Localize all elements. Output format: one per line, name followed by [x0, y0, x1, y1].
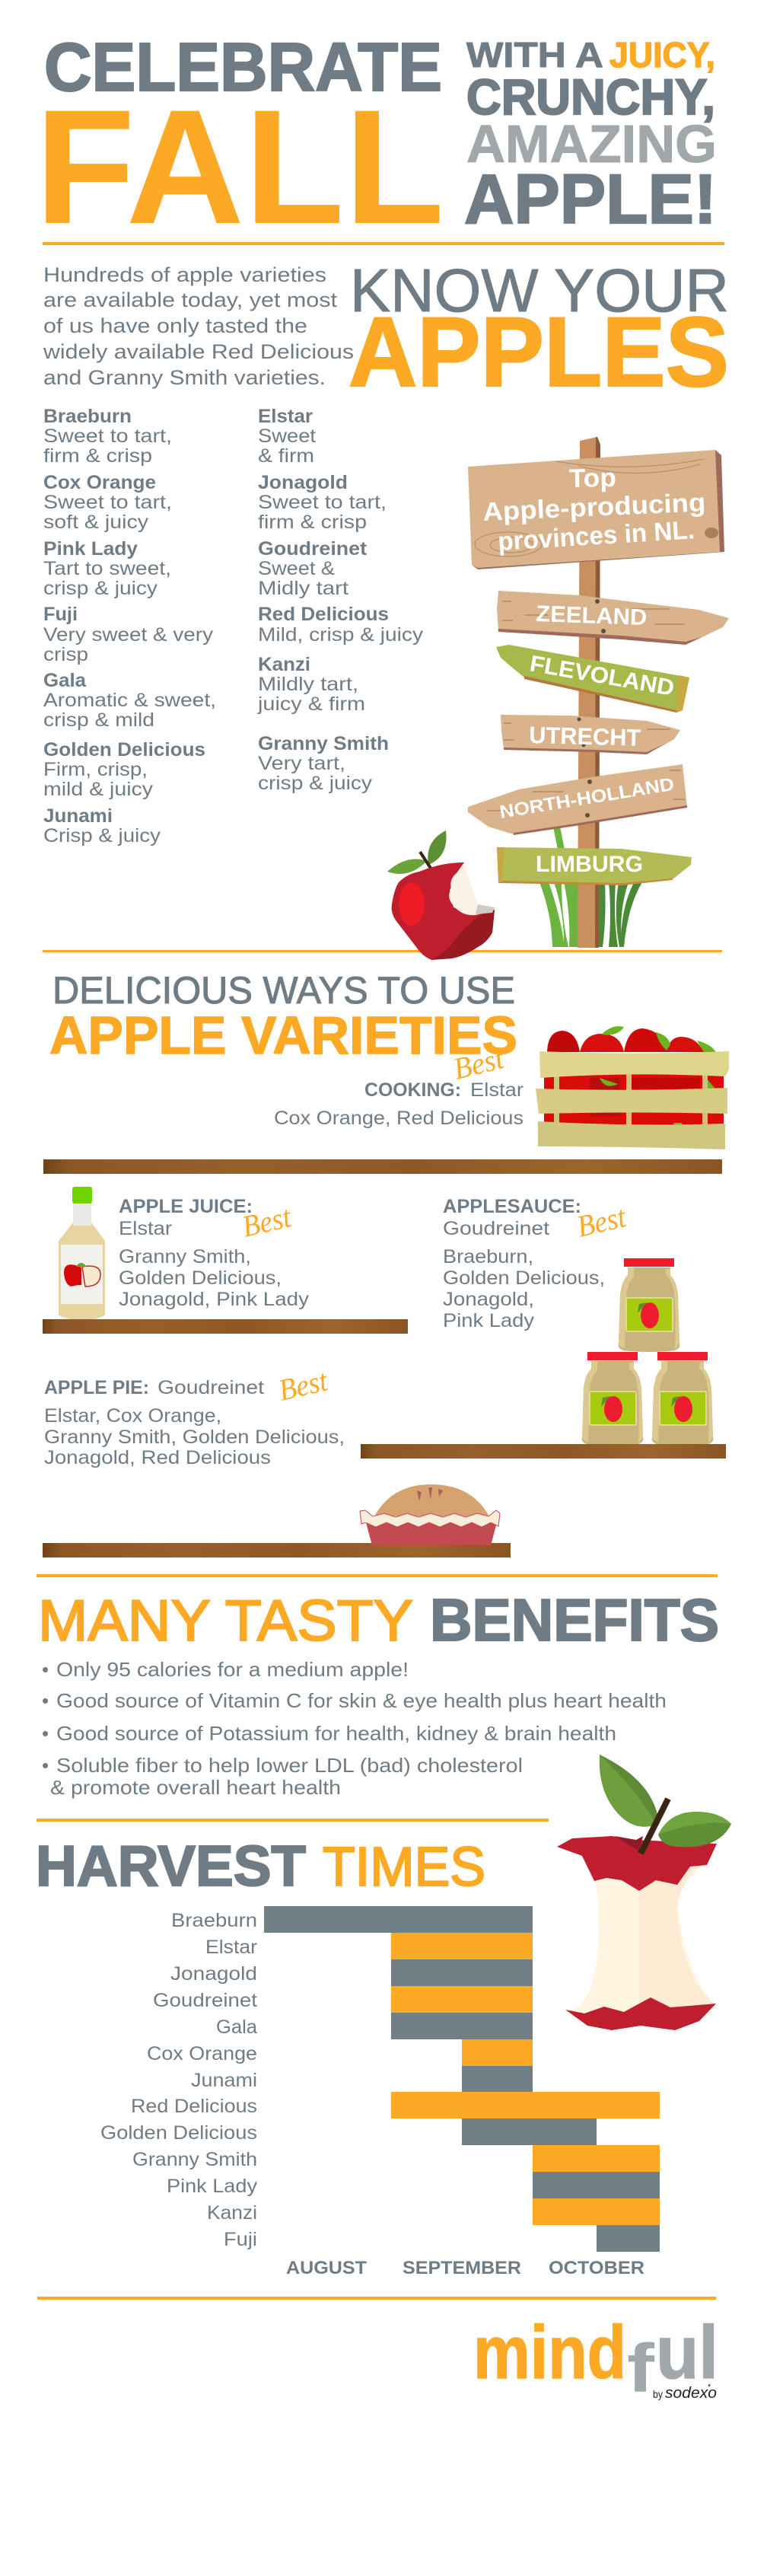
variety list: right column: Sweet — [258, 426, 316, 447]
variety list: right column: Sweet & — [258, 558, 335, 579]
divider rule — [37, 1574, 718, 1577]
signpost: Utrecht sign — [501, 715, 680, 754]
text: apple pie varieties: Granny Smith, Golden Delicious, — [44, 1427, 345, 1448]
text: applesauce varieties: Jonagold, — [443, 1289, 534, 1310]
signpost: North-Holland sign — [468, 764, 687, 835]
divider rule — [37, 1819, 549, 1822]
variety labels: Kanzi — [207, 2202, 257, 2224]
variety labels: Pink Lady — [167, 2176, 258, 2197]
variety list: left column: firm & crisp — [43, 445, 152, 467]
annotation: best cooking: Best — [450, 1041, 508, 1086]
heading: many tasty benefits: MANY TASTY — [38, 1589, 413, 1653]
signpost: Limburg sign — [497, 847, 692, 885]
text: applesauce varieties: Braeburn, — [443, 1246, 533, 1267]
harvest chart — [100, 1906, 660, 2278]
text: apple pie varieties — [44, 1377, 345, 1468]
variety list: right column: firm & crisp — [258, 512, 367, 533]
title: with a juicy, crunchy, amazing apple: AMAZING — [466, 114, 717, 174]
text: apple pie varieties: Elstar, Cox Orange, — [44, 1405, 221, 1427]
month axis: SEPTEMBER — [403, 2258, 521, 2278]
text: applesauce varieties — [443, 1196, 605, 1331]
variety labels: Cox Orange — [147, 2043, 257, 2064]
title: with a juicy, crunchy, amazing apple: APPLE! — [464, 161, 717, 238]
variety list: right column: Very tart, — [258, 753, 345, 774]
signpost: North-Holland sign: NORTH-HOLLAND — [498, 774, 676, 823]
variety list: left column: soft & juicy — [43, 512, 149, 533]
text: apple juice varieties: Jonagold, Pink Lady — [119, 1289, 310, 1310]
logo: mindful by sodexo: * — [708, 2383, 711, 2392]
title: with a juicy, crunchy, amazing apple: CRUNCHY, — [466, 69, 715, 125]
text: apple juice varieties — [119, 1196, 310, 1310]
variety list: right column: Kanzi — [258, 654, 310, 675]
variety labels: Goudreinet — [153, 1990, 257, 2011]
variety list: left column: Aromatic & sweet, — [43, 690, 216, 711]
title: celebrate fall: FALL — [35, 76, 444, 258]
variety list: left column — [43, 406, 216, 846]
divider rule — [43, 950, 722, 952]
heading: know your apples: KNOW YOUR — [350, 257, 729, 324]
icon: apple pie — [360, 1484, 500, 1545]
variety list: right column: juicy & firm — [257, 693, 365, 715]
variety labels: Golden Delicious — [100, 2122, 257, 2144]
benefits list — [42, 1658, 667, 1799]
variety labels: Elstar — [205, 1937, 257, 1958]
variety list: left column: crisp & juicy — [43, 578, 158, 599]
logo: mindful by sodexo: sodexo — [665, 2385, 717, 2402]
variety list: left column: Braeburn — [43, 406, 132, 427]
signpost: main sign: provinces in NL. — [497, 515, 695, 556]
icon: applesauce jars — [582, 1258, 713, 1446]
logo: mindful by sodexo: mind — [473, 2310, 626, 2394]
variety list: left column: Crisp & juicy — [43, 825, 161, 846]
icon: bitten apple — [387, 831, 495, 960]
variety list: right column: Granny Smith — [258, 733, 389, 754]
variety labels: Junami — [191, 2070, 257, 2091]
benefits list: • — [42, 1658, 49, 1681]
title: celebrate fall: CELEBRATE — [44, 30, 442, 106]
variety list: left column: Sweet to tart, — [43, 426, 172, 447]
intro paragraph: widely available Red Delicious — [43, 340, 354, 363]
variety list: right column: crisp & juicy — [258, 773, 373, 794]
title: with a juicy, crunchy, amazing apple: WITH A — [466, 35, 603, 75]
variety list: right column: Midly tart — [258, 578, 348, 599]
heading: harvest times — [36, 1834, 485, 1898]
variety list: left column: Very sweet & very — [43, 624, 214, 646]
text: cooking varieties — [274, 1079, 524, 1129]
benefits list: & promote overall heart health — [50, 1776, 341, 1799]
variety list: right column: Goudreinet — [258, 538, 368, 560]
variety list: right column: Sweet to tart, — [258, 492, 387, 513]
heading: delicious ways to use apple varieties — [49, 969, 517, 1065]
variety list: left column: mild & juicy — [43, 779, 154, 800]
text: applesauce varieties: Golden Delicious, — [443, 1267, 605, 1289]
intro paragraph: Hundreds of apple varieties — [43, 263, 326, 286]
text: apple pie varieties: Jonagold, Red Delicious — [44, 1447, 271, 1468]
heading: many tasty benefits: BENEFITS — [430, 1586, 719, 1653]
month axis — [286, 2258, 644, 2278]
text: applesauce varieties: Goudreinet — [443, 1218, 549, 1239]
variety list: left column: Cox Orange — [43, 472, 156, 493]
signpost: post — [578, 437, 600, 948]
benefits list: Only 95 calories for a medium apple! — [56, 1658, 409, 1681]
title: with a juicy, crunchy, amazing apple — [464, 35, 717, 238]
logo: mindful by sodexo: ul — [656, 2310, 718, 2394]
heading: harvest times: HARVEST — [36, 1834, 306, 1898]
signpost: Utrecht sign: UTRECHT — [529, 722, 641, 751]
icon: apple core — [557, 1755, 731, 2030]
variety list: right column: Red Delicious — [258, 604, 389, 625]
text: apple juice varieties: APPLE JUICE: — [119, 1196, 253, 1217]
month axis: OCTOBER — [549, 2258, 644, 2278]
variety labels: Fuji — [224, 2229, 257, 2250]
text: apple pie varieties: Goudreinet — [158, 1377, 264, 1398]
text: apple juice varieties: Golden Delicious, — [119, 1267, 282, 1289]
illustration: grass — [539, 827, 642, 947]
signpost: main sign — [468, 450, 724, 569]
divider rule — [37, 2297, 716, 2300]
signpost: main sign: Top — [568, 464, 616, 493]
variety list: left column: Gala — [43, 670, 87, 691]
text: cooking varieties: Cox Orange, Red Delicious — [274, 1108, 524, 1129]
text: applesauce varieties: Pink Lady — [443, 1310, 535, 1331]
signpost: main sign: Apple-producing — [482, 488, 706, 527]
intro paragraph: of us have only tasted the — [43, 314, 307, 337]
variety list: left column: Golden Delicious — [43, 739, 205, 760]
variety list: left column: Fuji — [43, 604, 78, 625]
annotation: best applesauce: Best — [574, 1199, 629, 1244]
benefits list: • — [42, 1754, 49, 1777]
icon: juice bottle — [59, 1187, 105, 1321]
text: apple pie varieties: APPLE PIE: — [44, 1377, 149, 1398]
variety list: left column: Firm, crisp, — [43, 759, 148, 780]
variety list: right column: Elstar — [258, 406, 313, 427]
heading: many tasty benefits — [38, 1586, 719, 1653]
benefits list: Soluble fiber to help lower LDL (bad) cholesterol — [56, 1754, 523, 1777]
signpost: Flevoland sign — [496, 645, 689, 713]
heading: delicious ways to use apple varieties: DELICIOUS WAYS TO USE — [53, 969, 515, 1012]
variety list: right column: Mildly tart, — [258, 674, 358, 695]
shelf — [361, 1444, 726, 1459]
variety list: right column: Mild, crisp & juicy — [258, 624, 424, 646]
month axis: AUGUST — [286, 2258, 367, 2278]
variety list: left column: Tart to sweet, — [43, 558, 171, 579]
variety list: left column: Sweet to tart, — [43, 492, 172, 513]
logo: mindful by sodexo — [473, 2310, 718, 2407]
benefits list: • — [42, 1722, 49, 1745]
text: apple juice varieties: Elstar — [119, 1218, 172, 1239]
annotation: best apple juice: Best — [239, 1199, 294, 1244]
signpost: Limburg sign: LIMBURG — [536, 852, 643, 877]
variety list: left column: crisp — [43, 644, 88, 665]
variety labels: Braeburn — [171, 1910, 257, 1931]
text: applesauce varieties: APPLESAUCE: — [443, 1196, 581, 1217]
variety list: right column — [257, 406, 424, 794]
signpost: Zeeland sign: ZEELAND — [536, 601, 648, 630]
shelf — [43, 1159, 722, 1174]
intro paragraph: and Granny Smith varieties. — [43, 366, 326, 389]
divider rule — [43, 242, 724, 245]
intro paragraph: are available today, yet most — [43, 289, 338, 311]
heading: delicious ways to use apple varieties: APPLE VARIETIES — [49, 1006, 517, 1065]
variety list: left column: Junami — [43, 805, 113, 827]
variety list: left column: Pink Lady — [43, 538, 138, 560]
benefits list: Good source of Potassium for health, kidney & brain health — [56, 1722, 616, 1745]
logo: mindful by sodexo: f — [627, 2331, 655, 2407]
signpost: Flevoland sign: FLEVOLAND — [528, 651, 676, 701]
text: cooking varieties: Elstar — [470, 1079, 524, 1101]
variety labels: Jonagold — [170, 1963, 257, 1985]
variety labels: Gala — [216, 2016, 257, 2038]
variety list: right column: Jonagold — [258, 472, 348, 493]
variety labels: Red Delicious — [131, 2096, 257, 2117]
benefits list: Good source of Vitamin C for skin & eye health plus heart health — [56, 1689, 667, 1712]
variety labels — [100, 1910, 258, 2250]
variety labels: Granny Smith — [132, 2149, 257, 2170]
shelf — [43, 1543, 511, 1557]
annotation: best apple pie: Best — [275, 1363, 331, 1408]
title: with a juicy, crunchy, amazing apple: JUICY, — [609, 35, 715, 75]
bars — [264, 1906, 660, 2252]
benefits list: • — [42, 1689, 49, 1712]
text: cooking varieties: COOKING: — [364, 1079, 461, 1101]
variety list: left column: crisp & mild — [43, 709, 154, 731]
shelf — [43, 1319, 408, 1334]
text: apple juice varieties: Granny Smith, — [119, 1246, 251, 1267]
heading: harvest times: TIMES — [323, 1837, 485, 1898]
icon: apple crate — [536, 1026, 729, 1149]
logo: mindful by sodexo: by — [653, 2388, 663, 2400]
heading: know your apples: APPLES — [348, 296, 729, 407]
signpost: Zeeland sign — [497, 591, 729, 645]
variety list: right column: & firm — [258, 445, 314, 467]
intro paragraph — [43, 263, 354, 389]
